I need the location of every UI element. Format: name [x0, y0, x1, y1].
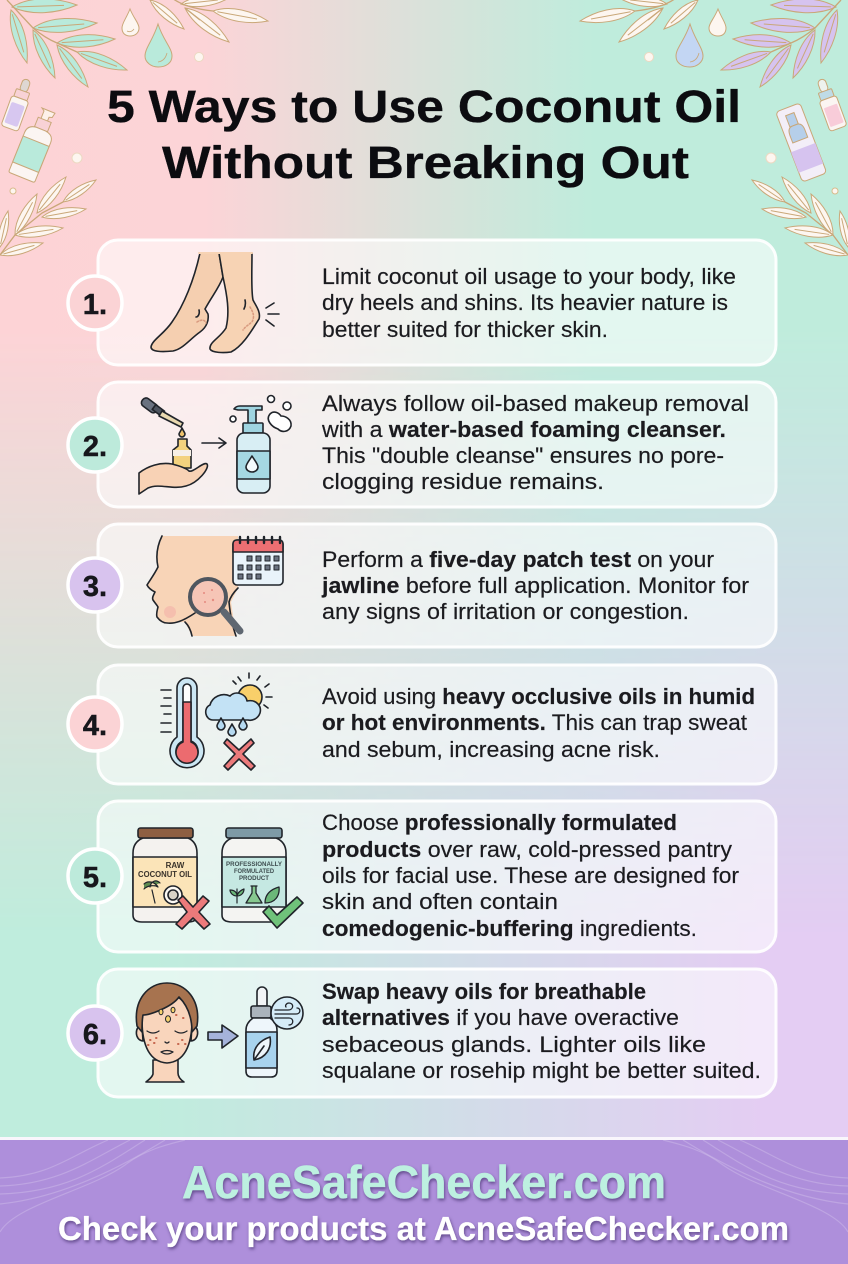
icon: raw coconut oil jar with cross: RAW: [166, 861, 185, 870]
number badge 4: 4.: [83, 710, 107, 742]
step 6 text: alternatives if you have overactive: [322, 1005, 679, 1030]
title: [107, 81, 741, 188]
step 5 text: products over raw, cold-pressed pantry: [322, 837, 732, 862]
icon: raw coconut oil jar with cross: COCONUT OIL: [138, 870, 192, 879]
icon: thermometer, rain cloud and cross: [161, 673, 272, 770]
icon: formulated product jar with check: [222, 828, 303, 928]
icon: face profile, magnifier and calendar: [147, 536, 283, 636]
number badge 4: [68, 697, 122, 751]
step 3 text: [321, 547, 749, 624]
step 6 text: sebaceous glands. Lighter oils like: [322, 1032, 706, 1057]
panel: step 2: [68, 382, 776, 507]
number badge 3: 3.: [83, 571, 107, 603]
step 6 text: Swap heavy oils for breathable: [322, 979, 646, 1004]
icon: raw coconut oil jar with cross: [133, 828, 210, 929]
step 5 text: oils for facial use. These are designed for: [322, 863, 739, 888]
panel: step 4: [68, 665, 776, 784]
icon: formulated product jar with check: FORMULATED: [234, 868, 274, 875]
step 4 text: or hot environments. This can trap sweat: [322, 710, 747, 735]
icon: dropper, oil bottle, arrow and foaming cleanser: [139, 396, 291, 494]
step 6 text: squalane or rosehip might be better suited.: [322, 1058, 761, 1083]
step 5 text: skin and often contain: [322, 889, 558, 914]
number badge 5: [68, 849, 122, 903]
panel: step 1: [68, 240, 776, 365]
number badge 5: 5.: [83, 862, 107, 894]
step 3 text: Perform a five-day patch test on your: [322, 547, 714, 572]
number badge 6: 6.: [83, 1019, 107, 1051]
step 2 text: clogging residue remains.: [322, 469, 604, 494]
step 2 text: This "double cleanse" ensures no pore-: [322, 443, 724, 468]
step 2 text: [321, 391, 749, 494]
step 4 text: [322, 684, 755, 762]
step 3 text: jawline before full application. Monitor for: [321, 573, 749, 598]
number badge 2: 2.: [83, 431, 107, 463]
step 3 text: any signs of irritation or congestion.: [322, 599, 689, 624]
step 1 text: Limit coconut oil usage to your body, like: [322, 264, 736, 289]
icon: formulated product jar with check: PRODUCT: [239, 875, 269, 882]
icon: face with breakouts, arrow and light oil bottle: [136, 983, 303, 1082]
number badge 6: [68, 1006, 122, 1060]
footer brand name: AcneSafeChecker.com: [182, 1156, 666, 1208]
decoration: top-right botanical corner: [579, 0, 848, 259]
icon: feet with dry heels: [151, 253, 279, 353]
panel: step 5: [68, 801, 776, 952]
footer banner: [0, 1137, 848, 1264]
step 5 text: Choose professionally formulated: [322, 810, 677, 835]
step 2 text: with a water-based foaming cleanser.: [321, 417, 726, 442]
step 4 text: Avoid using heavy occlusive oils in humid: [322, 684, 755, 709]
step 5 text: comedogenic-buffering ingredients.: [322, 916, 697, 941]
footer call to action: Check your products at AcneSafeChecker.com: [58, 1210, 789, 1247]
step 6 text: [322, 979, 761, 1083]
icon: formulated product jar with check: PROFESSIONALLY: [226, 861, 283, 868]
number badge 3: [68, 558, 122, 612]
number badge 2: [68, 418, 122, 472]
number badge 1: [68, 276, 122, 330]
step 1 text: better suited for thicker skin.: [322, 317, 608, 342]
step 4 text: and sebum, increasing acne risk.: [322, 737, 660, 762]
number badge 1: 1.: [83, 289, 107, 321]
title: 5 Ways to Use Coconut Oil: [107, 81, 741, 132]
step 1 text: [322, 264, 736, 342]
panel: step 6: [68, 969, 776, 1097]
step 2 text: Always follow oil-based makeup removal: [322, 391, 749, 416]
step 5 text: [322, 810, 739, 941]
decoration: top-left botanical corner: [0, 0, 269, 259]
title: Without Breaking Out: [162, 137, 689, 188]
panel: step 3: [68, 524, 776, 647]
step 1 text: dry heels and shins. Its heavier nature is: [322, 290, 728, 315]
